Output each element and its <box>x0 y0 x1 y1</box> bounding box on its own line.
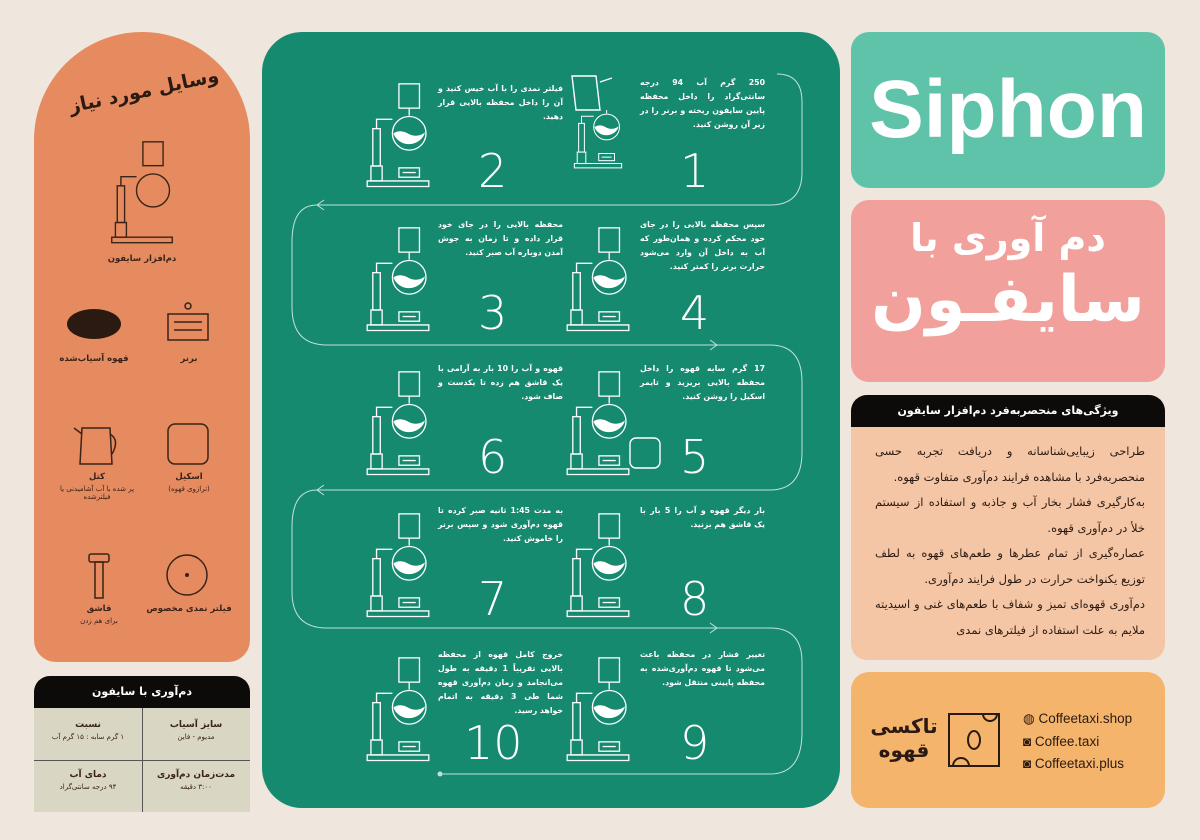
step 9 <box>566 650 765 770</box>
label: kettle <box>60 472 134 501</box>
panel: logo and contacts <box>851 672 1165 808</box>
cell: water temp <box>60 768 116 791</box>
step 10 <box>366 650 563 770</box>
label: spoon <box>80 604 118 625</box>
step 3: 3 <box>478 286 507 340</box>
step 4: سپس محفظه بالایی را در جای خود محکم کرده و همان‌طور که آب به داخل آن وارد می‌شود حرارت برنر را کمتر کنید. <box>640 220 765 271</box>
step 1: 1 <box>680 144 709 198</box>
label: scale: اسکیل <box>175 472 203 482</box>
label: felt filter: فیلتر نمدی مخصوص <box>146 604 232 614</box>
label: burner: برنر <box>181 354 197 364</box>
step 10: 10 <box>464 716 523 770</box>
title: Persian <box>851 200 1165 382</box>
logo: قهوه <box>879 738 929 762</box>
icon: kettle <box>74 427 116 465</box>
step 9: 9 <box>680 716 709 770</box>
features header <box>851 395 1165 427</box>
table: siphon brewing <box>34 676 250 812</box>
panel: brewing steps <box>262 32 840 808</box>
step 5 <box>566 364 765 484</box>
step 7: 7 <box>478 572 507 626</box>
contacts: ◙ Coffee.taxi <box>1023 734 1099 748</box>
path lines <box>292 74 802 776</box>
step 4: 4 <box>680 286 709 340</box>
icon: spoon <box>88 553 110 599</box>
table header: دم‌آوری با سایفون <box>92 685 192 698</box>
step 2: فیلتر نمدی را با آب خیس کنید و آن را داخل محفظه بالایی قرار دهید. <box>438 84 563 121</box>
cell: water temp: دمای آب <box>69 770 107 780</box>
step 7: به مدت 1:45 ثانیه صبر کرده تا قهوه دم‌آوری شود و سپس برنر را خاموش کنید. <box>438 506 563 543</box>
cell: grind size <box>170 718 222 741</box>
cell: brew time: مدت‌زمان دم‌آوری <box>157 770 235 780</box>
panel: unique features <box>851 395 1165 660</box>
cell: ratio: ۱ گرم سابه : ۱۵ گرم آب <box>52 733 124 741</box>
cell: brew time: ۳:۰۰ دقیقه <box>180 783 212 791</box>
cell: ratio: نسبت <box>75 720 101 730</box>
contacts: ◙ Coffeetaxi.plus <box>1023 756 1124 771</box>
heading: tools: وسایل مورد نیاز <box>67 64 221 118</box>
panel: tools needed <box>34 32 250 662</box>
label: scale <box>168 472 210 493</box>
features text: دم‌آوری قهوه‌ای تمیز و شفاف با طعم‌های غنی و اسیدیته ملایم به علت استفاده از فیلترهای نمدی <box>875 597 1145 636</box>
contacts <box>1023 711 1132 771</box>
step 2 <box>366 83 564 198</box>
features text: به‌کارگیری فشار بخار آب و جاذبه و استفاده از سیستم خلأ در دم‌آوری قهوه. <box>875 495 1145 534</box>
step 4 <box>566 220 766 340</box>
step 1: 250 گرم آب 94 درجه سانتی‌گراد را داخل محفظه پایین سایفون ریخته و برنر را در زیر آن روشن کنید. <box>640 78 765 129</box>
icon: siphon brewer <box>111 141 173 244</box>
logo <box>870 713 1000 767</box>
title: Persian: دم آوری با <box>910 216 1106 260</box>
step 8: بار دیگر قهوه و آب را 5 بار با یک قاشق هم بزنید. <box>640 506 765 529</box>
label: kettle: پر شده با آب آشامیدنی یا فیلترشده <box>60 485 134 501</box>
step 6: 6 <box>478 430 507 484</box>
logo: تاکسی <box>870 714 938 738</box>
step 1 <box>571 75 765 198</box>
step 7 <box>366 506 563 626</box>
label: spoon: برای هم زدن <box>80 617 118 625</box>
label: siphon: دم‌افزار سایفون <box>108 254 176 264</box>
icon: felt filter <box>166 554 208 596</box>
icon: burner <box>167 302 209 341</box>
step 6 <box>366 364 563 484</box>
step 8 <box>566 506 765 626</box>
cell: water temp: ۹۴ درجه سانتی‌گراد <box>60 783 116 791</box>
label: ground coffee: قهوه آسیاب‌شده <box>59 354 129 364</box>
step 3 <box>366 220 564 340</box>
cell: ratio <box>52 720 124 741</box>
icon: ground coffee <box>67 309 121 339</box>
title: Siphon: Siphon <box>869 64 1147 155</box>
label: kettle: کتل <box>89 472 105 482</box>
step 5: 5 <box>680 430 709 484</box>
cell: brew time <box>157 768 235 791</box>
features text <box>875 444 1145 637</box>
step 5: 17 گرم سابه قهوه را داخل محفظه بالایی بریزید و تایمر اسکیل را روشن کنید. <box>640 364 765 401</box>
cell: grind size: مدیوم - فاین <box>177 733 215 741</box>
step 8: 8 <box>680 572 709 626</box>
title: Persian: سایفـون <box>871 263 1145 337</box>
step 3: محفظه بالایی را در جای خود قرار داده و تا زمان به جوش آمدن دوباره آب صبر کنید. <box>438 220 563 257</box>
label: spoon: قاشق <box>87 604 111 614</box>
features header: ویژگی‌های منحصربه‌فرد دم‌افزار سایفون <box>898 404 1118 417</box>
step 9: تغییر فشار در محفظه باعث می‌شود تا قهوه دم‌آوری‌شده به محفظه پایینی منتقل شود. <box>640 650 765 687</box>
step 10: خروج کامل قهوه از محفظه بالایی تقریباً 1 دقیقه به طول می‌انجامد و زمان دم‌آوری قهوه شما طی 3 دقیقه به اتمام خواهد رسید. <box>438 650 563 715</box>
title: Siphon <box>851 32 1165 188</box>
step 2: 2 <box>478 144 507 198</box>
features text: طراحی زیبایی‌شناسانه و دریافت تجربه حسی منحصربه‌فرد با مشاهده فرایند دم‌آوری متفاوت قهوه. <box>875 444 1145 484</box>
cell: grind size: سایز آسیاب <box>170 720 222 730</box>
icon: scale <box>167 423 209 465</box>
label: scale: (ترازوی قهوه) <box>168 485 210 493</box>
features text: عصاره‌گیری از تمام عطرها و طعم‌های قهوه به لطف توزیع یکنواخت حرارت در طول فرایند دم‌آوری. <box>875 546 1145 586</box>
contacts: ◍ Coffeetaxi.shop <box>1023 711 1132 726</box>
table header <box>34 676 250 708</box>
step 6: قهوه و آب را 10 بار به آرامی با یک قاشق هم زده تا یکدست و صاف شود. <box>438 364 563 401</box>
